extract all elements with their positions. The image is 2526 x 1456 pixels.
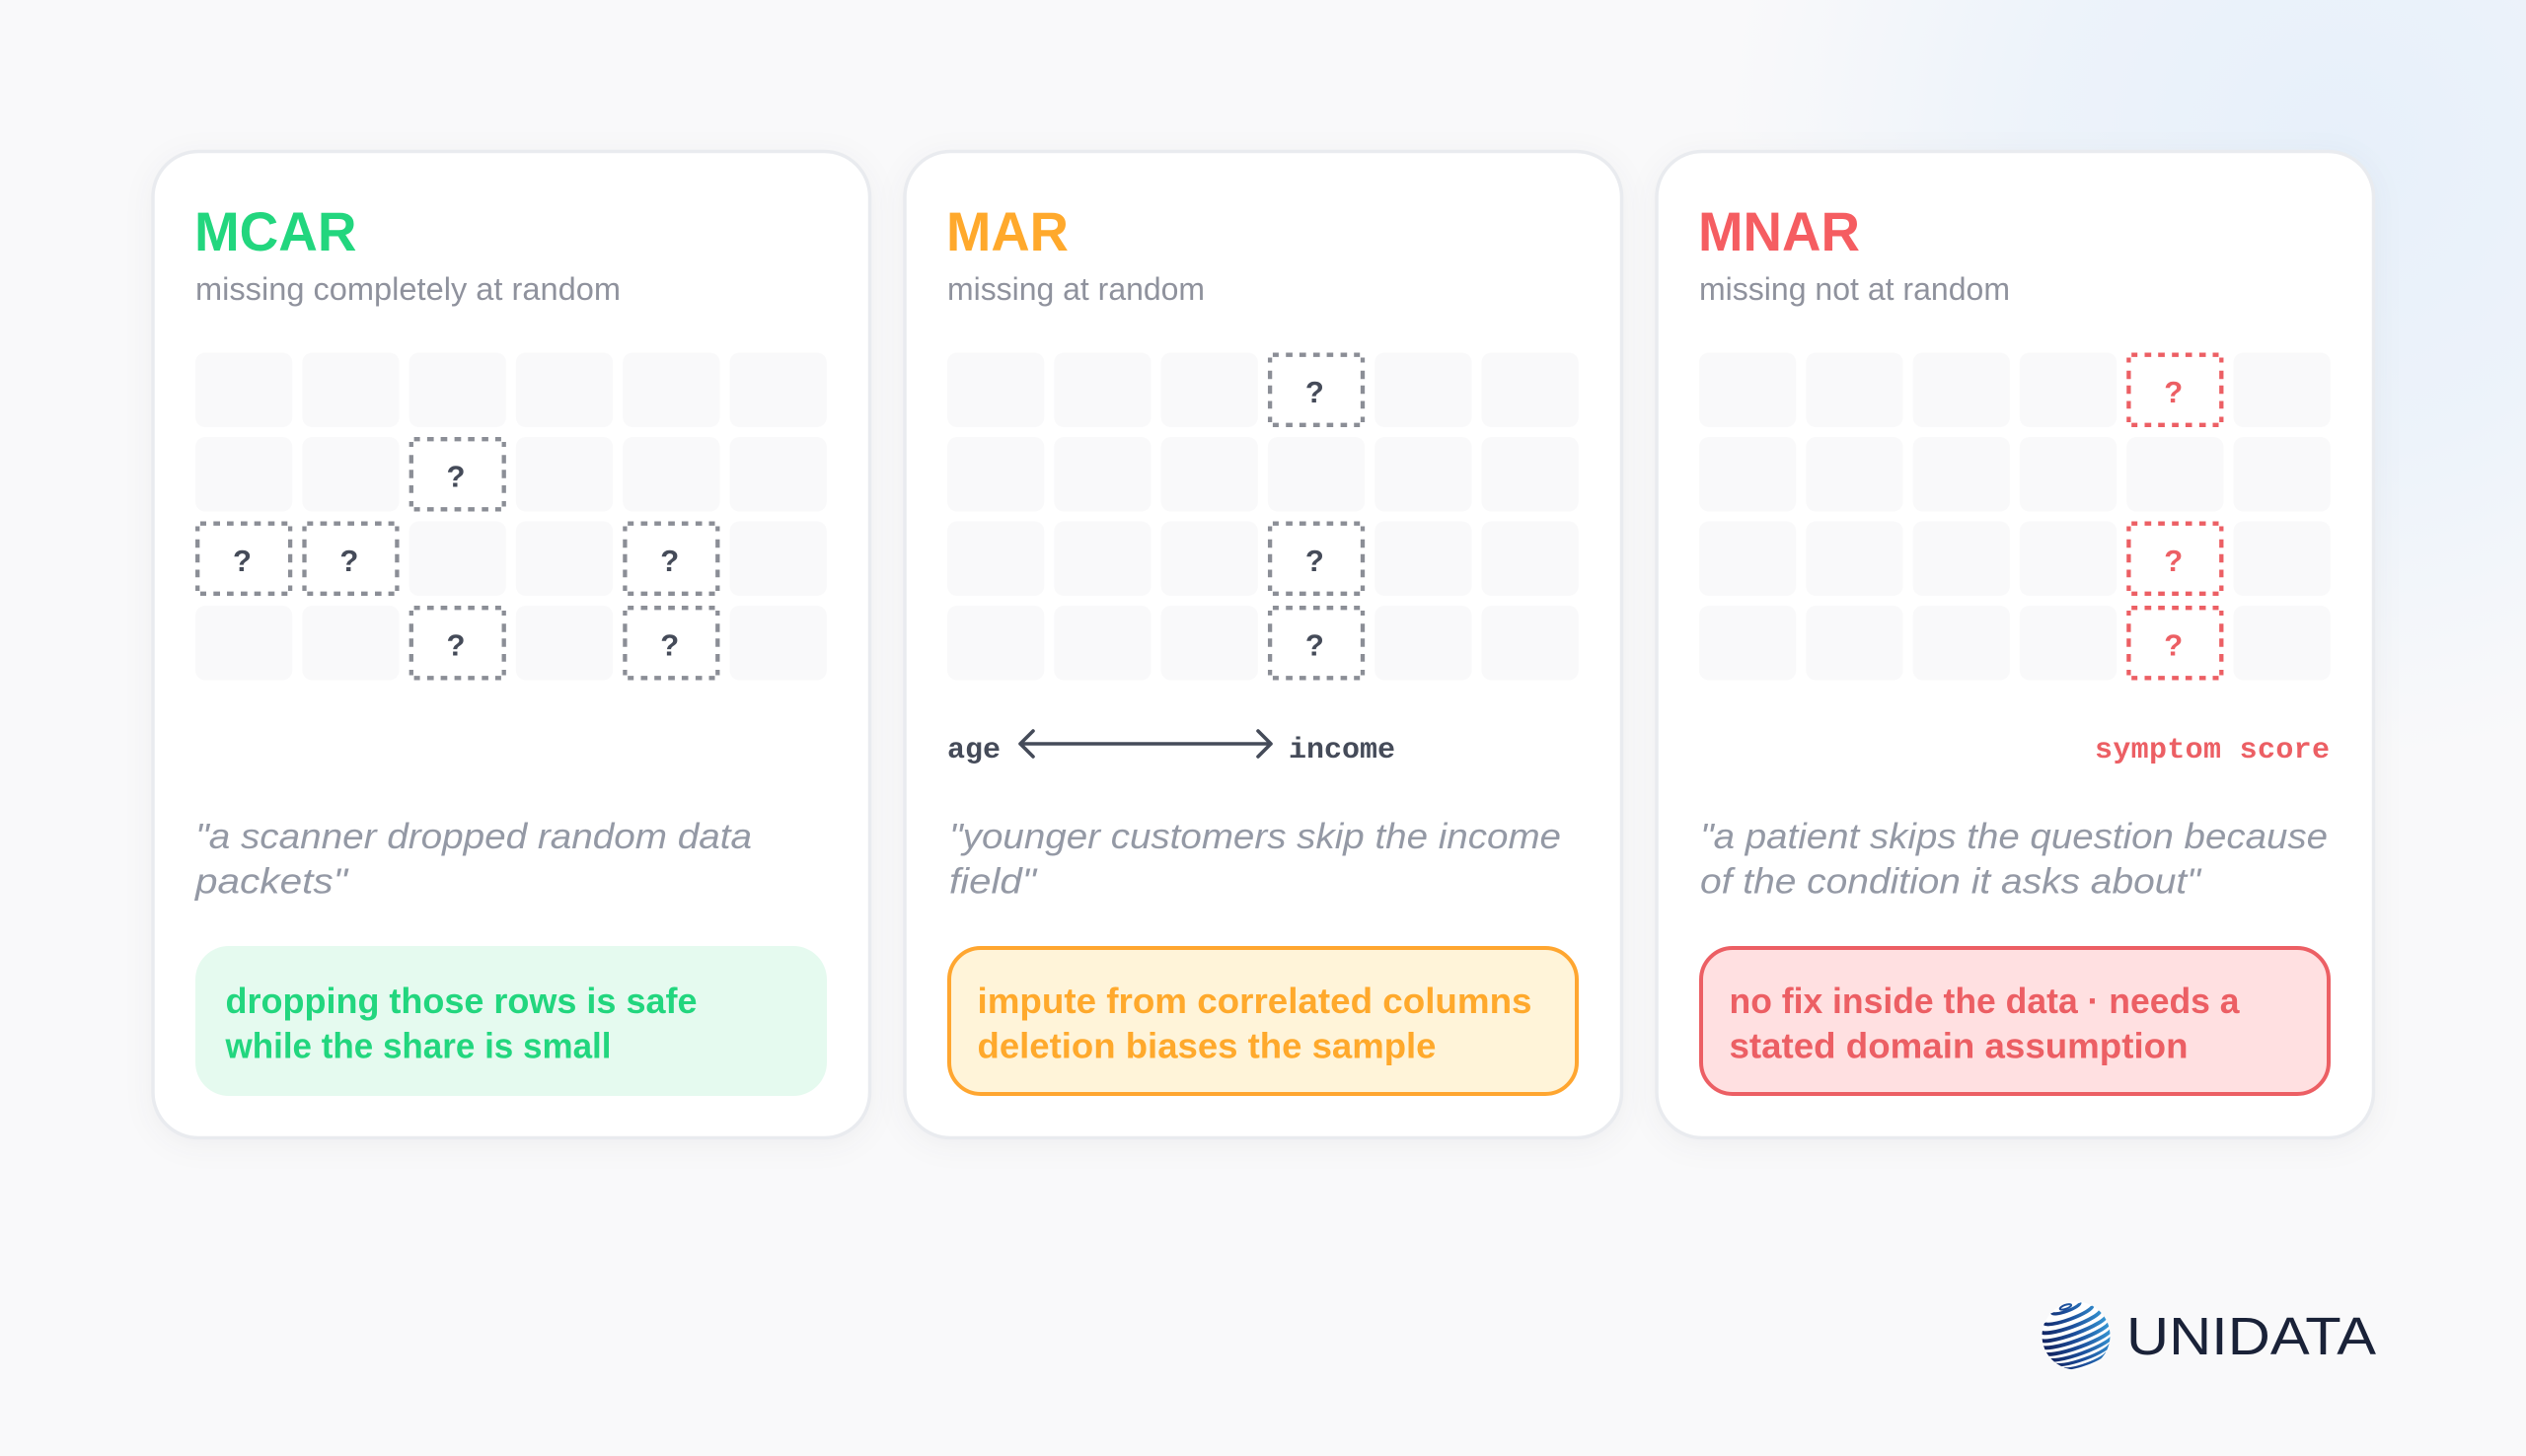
grid: MAR missing cells xyxy=(947,353,1579,681)
label: symptom score: symptom score xyxy=(2095,734,2330,767)
icon: striped globe xyxy=(2043,1302,2110,1369)
heading: MCAR: MCAR xyxy=(194,200,357,262)
grid: MAR missing cells: ? xyxy=(1305,544,1324,578)
grid: MCAR missing cells: ? xyxy=(660,544,679,578)
callout: MCAR advice: while the share is small xyxy=(225,1026,612,1066)
grid: MCAR missing cells: ? xyxy=(339,544,358,578)
card: MCAR background xyxy=(153,152,870,1138)
grid: MCAR missing cells: ? xyxy=(447,627,465,663)
label: age: age xyxy=(947,734,1001,767)
subtitle: MAR: missing at random xyxy=(947,271,1205,307)
callout: MCAR advice xyxy=(195,946,827,1096)
subtitle: MCAR: missing completely at random xyxy=(195,271,621,307)
callout: MAR advice: deletion biases the sample xyxy=(977,1026,1437,1066)
grid: MAR missing cells: ? xyxy=(1305,375,1324,409)
quote: MCAR example: packets" xyxy=(194,860,349,902)
grid: MNAR missing cells: ? xyxy=(2164,627,2183,663)
callout: MCAR advice: dropping those rows is safe xyxy=(225,981,697,1021)
card: MAR background xyxy=(905,152,1622,1138)
quote: MAR example: "younger customers skip the income xyxy=(949,816,1561,856)
callout: MAR advice xyxy=(949,948,1577,1094)
callout: MNAR advice xyxy=(1701,948,2329,1094)
grid: MCAR missing cells: ? xyxy=(447,460,465,493)
quote: MAR example: field" xyxy=(949,860,1038,902)
card: MNAR background xyxy=(1657,152,2374,1138)
quote: MCAR example: "a scanner dropped random data xyxy=(195,816,752,856)
grid: MNAR missing cells xyxy=(1699,353,2331,681)
heading: MAR: MAR xyxy=(946,200,1069,262)
arrow: age to income xyxy=(1020,731,1271,757)
panel: MNAR xyxy=(1657,152,2374,1138)
quote: MNAR example: of the condition it asks about" xyxy=(1700,860,2202,902)
grid: MAR missing cells: ? xyxy=(1305,627,1324,663)
callout: MAR advice: impute from correlated columns xyxy=(977,981,1531,1021)
grid: MNAR missing cells: ? xyxy=(2164,375,2183,409)
subtitle: MNAR: missing not at random xyxy=(1699,271,2010,307)
panel: MAR xyxy=(905,152,1622,1138)
grid: MCAR missing cells: ? xyxy=(233,544,252,578)
heading: MNAR: MNAR xyxy=(1698,200,1860,262)
grid: MCAR missing cells xyxy=(195,353,827,681)
quote: MNAR example: "a patient skips the question because xyxy=(1700,816,2328,856)
label: income: income xyxy=(1289,734,1395,767)
grid: MNAR missing cells: ? xyxy=(2164,544,2183,578)
panel: MCAR xyxy=(153,152,870,1138)
callout: MNAR advice: stated domain assumption xyxy=(1729,1026,2189,1066)
wordmark: UNIDATA: UNIDATA xyxy=(2126,1307,2376,1366)
grid: MCAR missing cells: ? xyxy=(660,627,679,663)
logo: Unidata xyxy=(2043,1302,2376,1369)
callout: MNAR advice: no fix inside the data · needs a xyxy=(1729,981,2240,1021)
